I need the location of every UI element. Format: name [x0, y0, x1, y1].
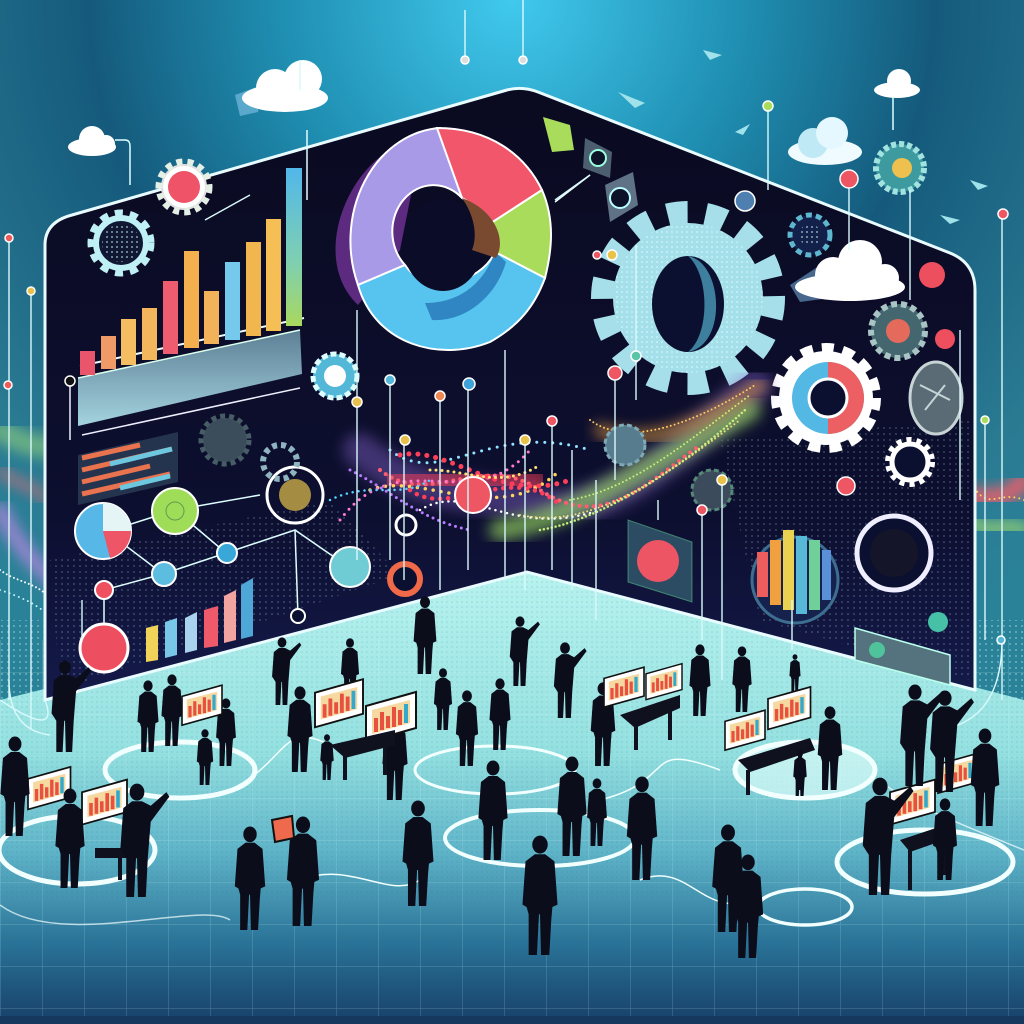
donut extrusion: [336, 142, 420, 305]
icon: small dotted gear: [790, 215, 830, 255]
icon: cloud top right: [874, 69, 920, 130]
workstations: [28, 664, 978, 890]
panel: main dark display wall: [45, 88, 975, 700]
icon: cloud on panel: [790, 240, 905, 302]
network: node diagram: [75, 488, 420, 672]
bars: [80, 168, 302, 375]
icon: small white gear: [888, 440, 932, 484]
floor rings: [0, 737, 1024, 925]
icon: gear with ring top right: [876, 144, 924, 192]
chart: panel screen lower right: [855, 628, 950, 685]
icon: cloud upper right: [788, 117, 862, 165]
chart: bars bottom left: [146, 578, 253, 662]
chart: bar chart: [65, 168, 304, 440]
donut hole: [403, 199, 483, 291]
floor: [0, 570, 1024, 1024]
donut slices: [350, 128, 462, 285]
tablet: [272, 816, 294, 842]
dot texture on panel: [50, 420, 970, 690]
icon: gear top left red: [159, 162, 209, 212]
trend arrow: [70, 381, 300, 440]
icon: grey dial right: [910, 362, 962, 434]
pie node: [75, 503, 131, 559]
icon: gear left blue: [91, 213, 151, 273]
icon: white ring dial: [857, 516, 948, 632]
donut inner wall: [425, 252, 506, 320]
chart: 3D donut: [336, 128, 551, 350]
nebula: colourful particle cloud: [330, 385, 760, 530]
icon: circular bar gauge: [752, 530, 838, 623]
birds: [618, 50, 988, 224]
icon: blue red gear: [776, 348, 876, 448]
ribbon: colour wave sides: [0, 430, 1024, 640]
icon: large pale gear: [603, 213, 773, 383]
people: front row: [0, 685, 999, 958]
icon: gear cluster centre left: [201, 354, 732, 535]
connector lines with nodes: [0, 0, 1002, 735]
chart base band: [78, 330, 302, 426]
icon: cloud top: [235, 60, 328, 200]
chart: small stripes: [78, 432, 178, 505]
connector dots: [4, 56, 1008, 644]
bottom edge band: [0, 1016, 1024, 1024]
icon: cloud left: [68, 126, 130, 185]
icon: hex gears top: [543, 117, 638, 222]
people: back row: [52, 596, 801, 800]
icon: colourful gear right: [871, 262, 955, 358]
chart: red circle screen: [628, 520, 692, 602]
